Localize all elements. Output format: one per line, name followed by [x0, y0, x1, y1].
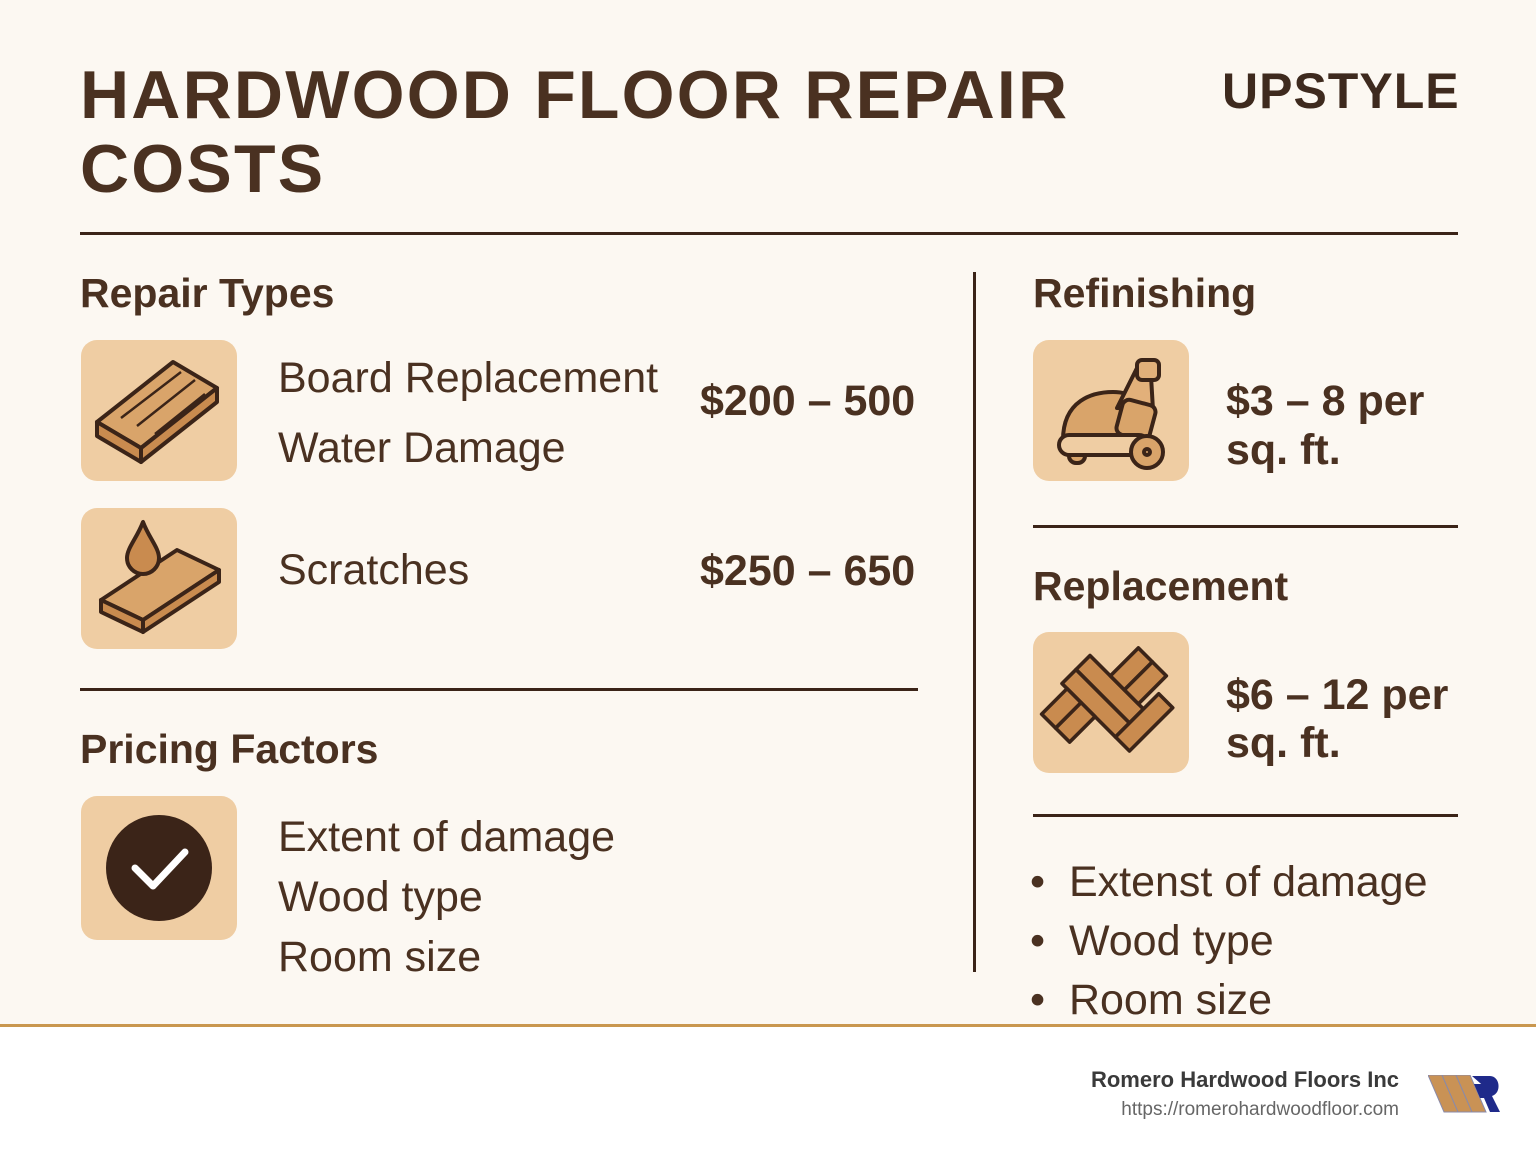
icon: water drop board — [81, 508, 237, 649]
title — [80, 57, 1069, 207]
price: replacement: sq. ft. — [1226, 719, 1341, 767]
text: factors list: Wood type — [278, 873, 483, 921]
price: 250-650: $250 – 650 — [700, 547, 915, 595]
icon: check — [81, 796, 237, 940]
text: factors list: Room size — [278, 933, 481, 981]
footer — [0, 1024, 1536, 1154]
price: replacement — [1226, 671, 1448, 767]
icon: board — [81, 340, 237, 481]
heading: replacement: Replacement — [1033, 563, 1288, 609]
text: board replacement: Board Replacement — [278, 354, 658, 402]
text: scratches: Scratches — [278, 546, 469, 594]
bullet list: factors: • Wood type — [1030, 917, 1274, 965]
heading: repair types: Repair Types — [80, 270, 334, 316]
icon: sander — [1033, 340, 1189, 481]
price: refinishing: $3 – 8 per — [1226, 377, 1424, 425]
text: factors list — [278, 813, 615, 981]
price: refinishing: sq. ft. — [1226, 426, 1341, 474]
bullet list: factors — [1030, 858, 1428, 1024]
title: HARDWOOD FLOOR REPAIR — [80, 57, 1069, 133]
heading: pricing factors: Pricing Factors — [80, 726, 378, 772]
title: COSTS — [80, 131, 325, 207]
text: water damage: Water Damage — [278, 424, 566, 472]
logo — [1428, 1075, 1500, 1112]
text: factors list: Extent of damage — [278, 813, 615, 861]
price: refinishing — [1226, 377, 1424, 474]
price: replacement: $6 – 12 per — [1226, 671, 1448, 719]
footer: company name: Romero Hardwood Floors Inc — [1091, 1067, 1399, 1092]
footer: url: https://romerohardwoodfloor.com — [1121, 1099, 1399, 1120]
brand: upstyle: UPSTYLE — [1222, 63, 1460, 119]
bullet list: factors: • Extenst of damage — [1030, 858, 1428, 906]
bullet list: factors: • Room size — [1030, 976, 1272, 1024]
panel: replacement — [1033, 563, 1448, 773]
panel: refinishing — [1033, 270, 1424, 481]
icon: parquet — [1033, 632, 1189, 773]
panel: pricing factors — [80, 726, 615, 981]
price: 200-500: $200 – 500 — [700, 377, 915, 425]
heading: refinishing: Refinishing — [1033, 270, 1256, 316]
panel: repair types — [80, 270, 915, 649]
